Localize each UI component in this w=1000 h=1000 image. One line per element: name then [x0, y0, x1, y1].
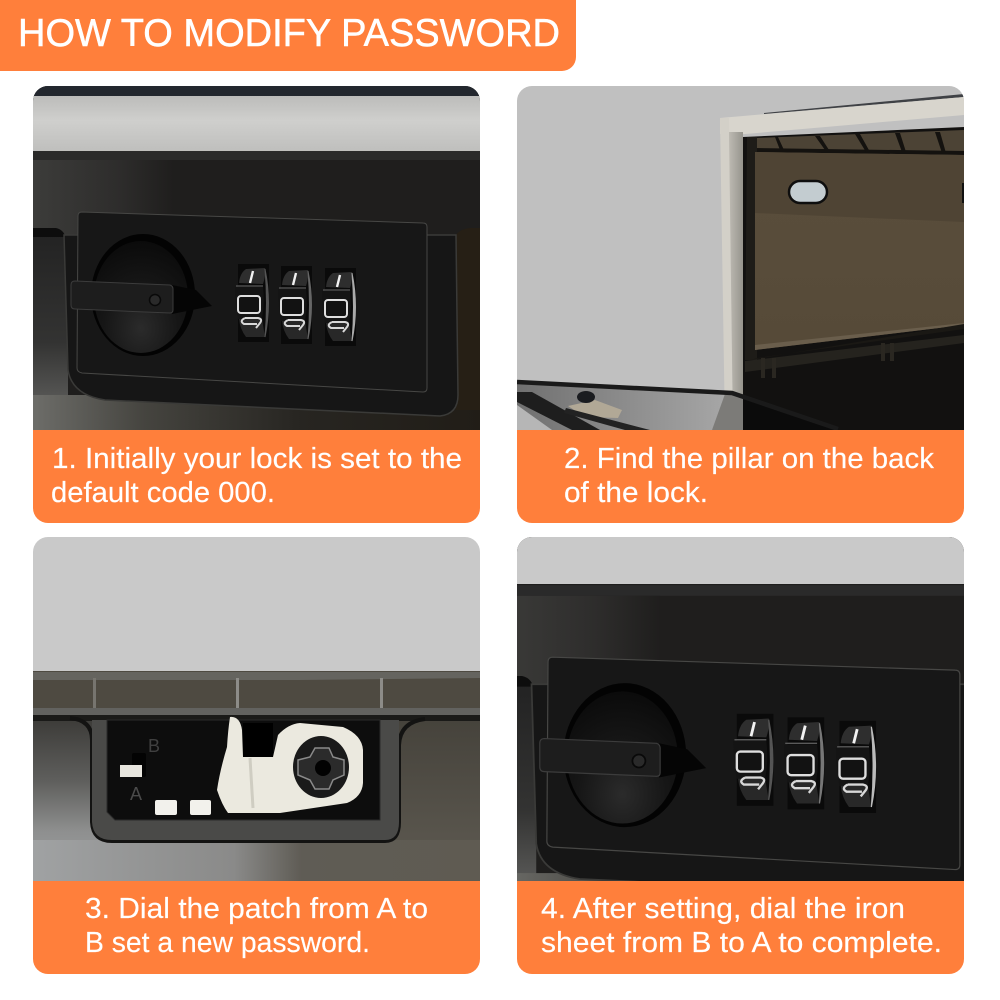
- caption bar 1: [33, 430, 480, 523]
- caption bar 4: [517, 881, 964, 974]
- caption bar 4: sheet from B to A to complete.: [541, 927, 942, 959]
- handle: [71, 281, 173, 313]
- photo: lock front view: [33, 86, 480, 430]
- caption bar 4: 4. After setting, dial the iron: [541, 893, 905, 925]
- metal patch: [217, 717, 363, 813]
- combination wheels: [733, 714, 876, 813]
- photo: open case showing lock back: [517, 86, 966, 430]
- switch slot: B: [148, 736, 160, 756]
- switch slot: [120, 736, 211, 815]
- photo: back of lock with patch: [33, 537, 480, 881]
- caption bar 3: B set a new password.: [85, 927, 370, 959]
- caption bar 3: 3. Dial the patch from A to: [85, 893, 428, 925]
- caption bar 3: [33, 881, 480, 974]
- panel: step 2: [517, 86, 966, 523]
- caption bar 1: 1. Initially your lock is set to the: [52, 443, 462, 475]
- panel: step 4: [517, 537, 964, 974]
- photo: lock close up: [517, 537, 964, 881]
- pillar: [564, 391, 650, 430]
- title: HOW TO MODIFY PASSWORD: [18, 12, 560, 55]
- caption bar 2: [517, 430, 964, 523]
- cam hub: [293, 736, 349, 798]
- dial: [563, 683, 706, 827]
- oval slot: [789, 181, 827, 203]
- handle: [540, 739, 660, 776]
- caption bar 2: of the lock.: [564, 477, 708, 509]
- caption bar 2: 2. Find the pillar on the back: [564, 443, 935, 475]
- lock plate: [540, 657, 960, 870]
- dial: [91, 234, 212, 356]
- panel: step 1: [33, 86, 480, 523]
- lock plate: [71, 212, 427, 392]
- panel: step 3: [33, 537, 480, 974]
- lock cavity: [107, 720, 380, 820]
- caption bar 1: default code 000.: [51, 477, 275, 509]
- header banner: [0, 0, 576, 71]
- switch slot: A: [130, 784, 142, 804]
- combination wheels: [235, 264, 356, 346]
